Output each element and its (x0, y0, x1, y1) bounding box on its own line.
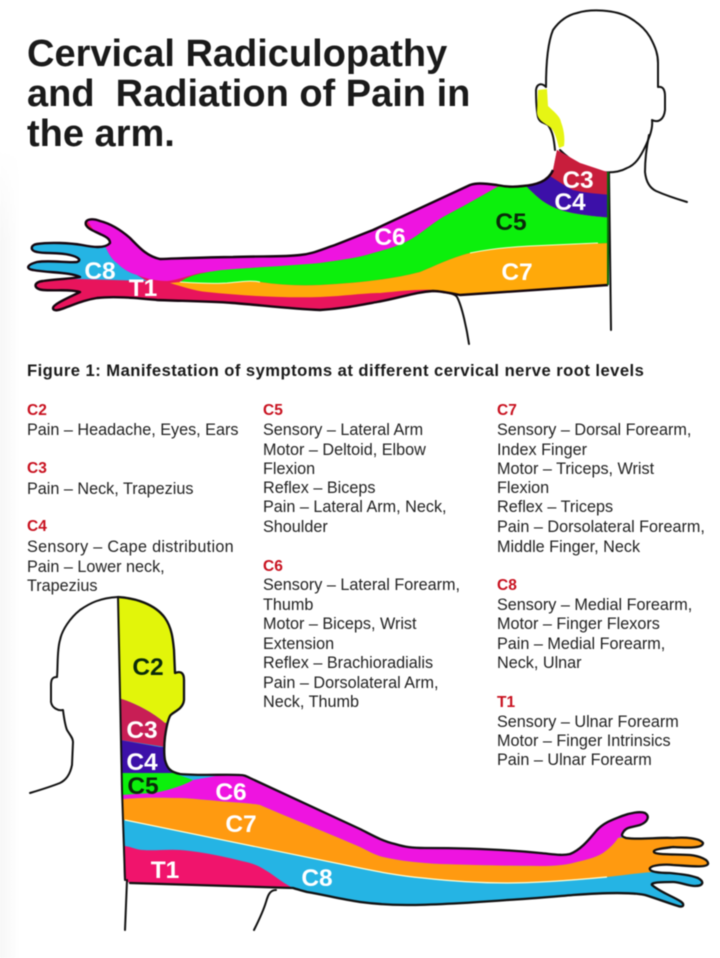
region: C5 (180, 182, 612, 285)
column 3: C7 C8 T1: Pain – Dorsolateral Forearm, (497, 518, 705, 536)
title: Cervical Radiculopathy (27, 33, 447, 75)
column 3: C7 C8 T1: Pain – Medial Forearm, (497, 635, 665, 653)
column 1: C2 C3 C4: Pain – Lower neck, (27, 558, 165, 576)
column 2: C5 C6: Motor – Biceps, Wrist (263, 615, 417, 633)
column 2: C5 C6: Reflex – Brachioradialis (263, 654, 433, 672)
column 3: C7 C8 T1: T1 (497, 694, 515, 711)
bottom: dermatome regions (118, 598, 708, 906)
column 2: C5 C6: Pain – Lateral Arm, Neck, (263, 498, 447, 516)
bottom: level labels: C8 (301, 865, 333, 892)
top: level labels: C4 (554, 189, 586, 216)
top: yellow C2 patch (537, 89, 564, 148)
region: C2 (118, 598, 184, 724)
column 2: C5 C6: Neck, Thumb (263, 693, 359, 711)
column 2: C5 C6: Sensory – Lateral Forearm, (263, 576, 460, 594)
region: C4 (526, 176, 608, 218)
top: head and neck outline (443, 10, 687, 344)
region: C3 (120, 698, 167, 748)
region: C7 (110, 798, 720, 883)
bottom: white seam line (125, 820, 607, 883)
top: level labels: C7 (501, 259, 533, 286)
column 2: C5 C6: Flexion (263, 460, 315, 478)
bottom: level labels: C6 (215, 779, 247, 806)
column 3: C7 C8 T1: Motor – Triceps, Wrist (497, 460, 655, 478)
region: C8 (28, 243, 148, 282)
column 3: C7 C8 T1: Motor – Finger Flexors (497, 615, 660, 633)
column 3: C7 C8 T1: Middle Finger, Neck (497, 538, 641, 556)
column 3: C7 C8 T1: Sensory – Ulnar Forearm (497, 713, 679, 731)
column 1: C2 C3 C4: Trapezius (27, 577, 97, 595)
top: level labels (84, 167, 594, 302)
region: T1 (123, 845, 291, 888)
region: C6 (110, 770, 660, 866)
bottom: level labels: T1 (151, 857, 179, 884)
title: the arm. (27, 113, 175, 155)
region: C5 (110, 773, 193, 795)
column 3: C7 C8 T1: Index Finger (497, 441, 588, 459)
column 3: C7 C8 T1: C8 (497, 577, 517, 594)
column 1: C2 C3 C4: Pain – Headache, Eyes, Ears (27, 421, 238, 439)
column 2: C5 C6: Pain – Dorsolateral Arm, (263, 674, 438, 692)
top: level labels: T1 (129, 275, 157, 302)
bottom: level labels (126, 654, 333, 892)
region: C7 (170, 243, 612, 297)
top: level labels: C3 (562, 167, 594, 194)
column 1: C2 C3 C4: C3 (27, 460, 47, 477)
column 2: C5 C6: Reflex – Biceps (263, 479, 375, 497)
region: C4 (121, 740, 173, 774)
column 3: C7 C8 T1: Neck, Ulnar (497, 654, 582, 672)
column 3: C7 C8 T1: Sensory – Medial Forearm, (497, 596, 692, 614)
top: level labels: C8 (84, 258, 116, 285)
title: and Radiation of Pain in (27, 73, 470, 115)
bottom: level labels: C2 (132, 654, 164, 681)
bottom arm diagram (30, 590, 720, 930)
column 2: C5 C6: Motor – Deltoid, Elbow (263, 441, 426, 459)
bottom: level labels: C5 (127, 773, 159, 800)
bottom: level labels: C3 (126, 717, 158, 744)
column 1: C2 C3 C4: Pain – Neck, Trapezius (27, 480, 193, 498)
top: white seam lines (180, 243, 598, 283)
column 3: C7 C8 T1 (497, 402, 705, 769)
column 1: C2 C3 C4: C4 (27, 518, 47, 535)
bottom: body outline (30, 597, 708, 930)
bottom: level labels: C4 (126, 749, 158, 776)
bottom: level labels: C7 (225, 811, 257, 838)
column 1: C2 C3 C4 (27, 402, 238, 595)
column 1: C2 C3 C4: C2 (27, 402, 47, 419)
column 3: C7 C8 T1: Pain – Ulnar Forearm (497, 751, 652, 769)
figure caption: Figure 1: Manifestation of symptoms at different cervical nerve root levels (27, 361, 644, 380)
column 2: C5 C6: Thumb (263, 596, 313, 614)
region: C6 (80, 175, 500, 281)
column 2: C5 C6: C5 (263, 402, 283, 419)
column 3: C7 C8 T1: Reflex – Triceps (497, 498, 613, 516)
top: level labels: C5 (495, 209, 527, 236)
column 3: C7 C8 T1: Sensory – Dorsal Forearm, (497, 421, 691, 439)
top: arm outline (28, 170, 608, 310)
region: C3 (550, 150, 608, 195)
column 3: C7 C8 T1: C7 (497, 402, 517, 419)
column 2: C5 C6: C6 (263, 558, 283, 575)
top: level labels: C6 (374, 224, 406, 251)
top: dermatome regions (28, 150, 608, 310)
column 3: C7 C8 T1: Motor – Finger Intrinsics (497, 732, 671, 750)
column 1: C2 C3 C4: Sensory – Cape distribution (27, 538, 234, 556)
title (27, 33, 470, 155)
column 2: C5 C6 (263, 402, 460, 711)
top arm diagram (20, 10, 687, 344)
column 2: C5 C6: Shoulder (263, 518, 328, 536)
column 2: C5 C6: Extension (263, 635, 334, 653)
column 3: C7 C8 T1: Flexion (497, 479, 549, 497)
column 2: C5 C6: Sensory – Lateral Arm (263, 421, 423, 439)
